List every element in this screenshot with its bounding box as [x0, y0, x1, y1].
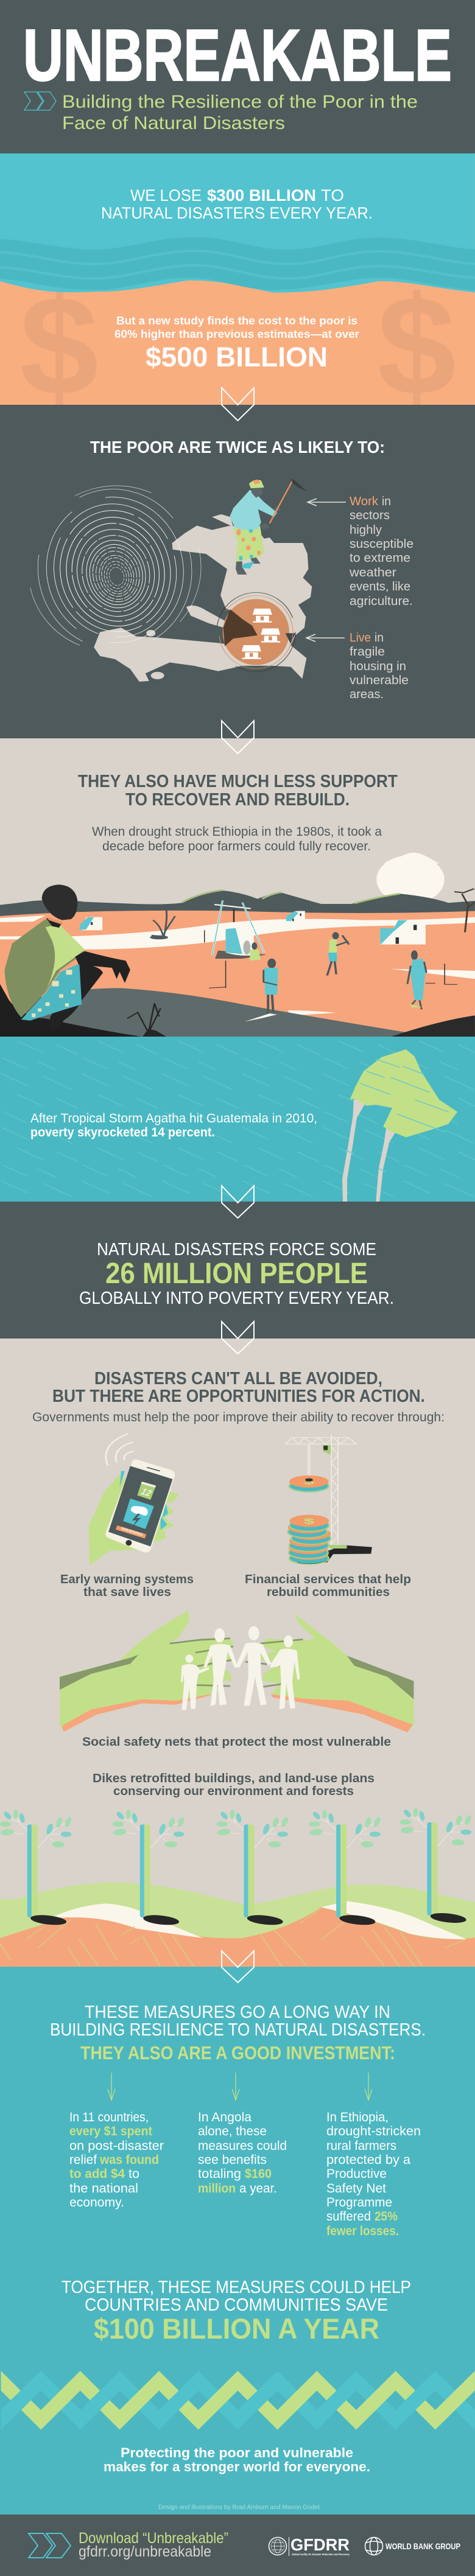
heading: THESE MEASURES GO A LONG WAY IN	[85, 2003, 390, 2022]
icon: crane with coins	[286, 1435, 372, 1564]
subtitle	[62, 92, 418, 133]
text: dikes: conserving our environment and forests	[113, 1784, 354, 1798]
column: Angola: million	[198, 2182, 236, 2196]
panel: less support	[0, 738, 475, 1037]
stat: 300 billion: $300 BILLION	[207, 186, 316, 205]
column: Ethiopia: In Ethiopia,	[326, 2110, 389, 2124]
icon: phone in hand: WARNING	[120, 1527, 144, 1537]
heading: BUT THERE ARE OPPORTUNITIES FOR ACTION.	[52, 1387, 425, 1406]
stat: 300 billion: WE LOSE	[130, 186, 202, 205]
zigzag band	[1, 2371, 475, 2430]
seated person	[50, 964, 103, 1031]
panel: opportunities	[0, 1339, 475, 1967]
column: Angola: alone, these	[198, 2124, 267, 2138]
closing message: Protecting the poor and vulnerable	[121, 2445, 353, 2460]
text: work: highly	[350, 523, 382, 537]
column: Ethiopia: Productive	[326, 2167, 387, 2181]
text: live: areas.	[350, 687, 384, 701]
text: work: susceptible	[350, 537, 413, 551]
panel: the poor	[0, 405, 475, 738]
farmer figure	[230, 478, 307, 575]
arrow to live	[306, 634, 345, 642]
text: early warning	[60, 1572, 194, 1599]
column: 11 countries: on post-disaster	[69, 2139, 164, 2153]
icon: crane with coins: $	[304, 1517, 314, 1525]
subtitle: Building the Resilience of the Poor in the	[62, 92, 418, 112]
arrow: chevron 1	[222, 388, 254, 421]
column: 11 countries: to add $4	[69, 2167, 125, 2181]
text: live	[350, 631, 409, 701]
stat: 26 million people: GLOBALLY INTO POVERTY EVERY YEAR.	[79, 1289, 394, 1308]
child with hoe	[332, 932, 339, 939]
heading	[78, 772, 398, 810]
arrow: chevron 3	[222, 1186, 254, 1218]
stat: 500 billion	[114, 314, 359, 373]
text block: Agatha	[30, 1111, 317, 1139]
stat: 500 billion: $500 BILLION	[146, 341, 328, 373]
download text: Download “Unbreakable”	[79, 2530, 228, 2547]
stat: 26 million people	[79, 1240, 394, 1308]
download text	[79, 2530, 228, 2560]
text block: Agatha: After Tropical Storm Agatha hit Guatemala in 2010,	[30, 1111, 317, 1125]
heading	[50, 2003, 426, 2040]
column: 11 countries: In 11 countries,	[69, 2110, 149, 2124]
heading: DISASTERS CAN'T ALL BE AVOIDED,	[94, 1369, 382, 1388]
heading: BUILDING RESILIENCE TO NATURAL DISASTERS.	[50, 2020, 426, 2040]
text: work: sectors	[350, 508, 390, 522]
heading	[52, 1369, 425, 1406]
text: work: to extreme	[350, 551, 410, 565]
icon: phone in hand	[89, 1434, 178, 1566]
text: live: in	[375, 631, 384, 645]
closing message: makes for a stronger world for everyone.	[104, 2459, 370, 2474]
column: Ethiopia: Programme	[326, 2196, 392, 2210]
arrows	[108, 2073, 372, 2100]
text: work: events, like	[350, 579, 410, 593]
text block: Agatha: poverty skyrocketed 14 percent.	[30, 1125, 215, 1139]
arrow: chevron 4	[222, 1321, 254, 1354]
column: Ethiopia: drought-stricken	[326, 2124, 421, 2138]
foreground black ground	[0, 984, 142, 1037]
heading: THEY ALSO HAVE MUCH LESS SUPPORT	[78, 772, 398, 791]
stat: 100 billion	[62, 2278, 411, 2345]
text: live: vulnerable	[350, 673, 409, 687]
saplings row	[0, 1808, 473, 1927]
dead trees	[152, 906, 175, 937]
illustration: wind-blown palms	[342, 1049, 457, 1202]
icon: dollar sign right: $	[377, 267, 456, 425]
column: Ethiopia: Safety Net	[326, 2182, 386, 2196]
arrow to work	[308, 499, 346, 506]
column: 11 countries: every $1 spent	[69, 2124, 152, 2138]
logo: GFDRR	[269, 2535, 350, 2556]
credit: Design and illustrations by Brad Amburn and Manon Godet	[158, 2504, 320, 2511]
column: Angola: totaling	[198, 2167, 241, 2181]
stat: 500 billion: But a new study finds the cost to the poor is	[116, 314, 357, 327]
heading: TO RECOVER AND REBUILD.	[125, 790, 350, 810]
arrow: chevron 2	[222, 721, 254, 754]
column: Ethiopia: rural farmers	[326, 2139, 396, 2153]
column: Ethiopia: suffered	[326, 2210, 371, 2224]
header band	[0, 0, 475, 153]
stat: 100 billion: COUNTRIES AND COMMUNITIES SAVE	[85, 2295, 388, 2315]
stat: 26 million people: NATURAL DISASTERS FORCE SOME	[97, 1240, 376, 1259]
map of Hispaniola	[94, 514, 312, 682]
text: financial services: Financial services that help	[245, 1572, 411, 1586]
footer	[0, 2515, 475, 2576]
panel: losses	[0, 153, 475, 425]
icon: footer chevrons	[29, 2533, 71, 2558]
panel: 26 million	[0, 1202, 475, 1339]
vulnerable area circle with houses	[217, 592, 295, 671]
icon: dollar sign left: $	[19, 267, 99, 425]
stat: 26 million people: 26 MILLION PEOPLE	[105, 1258, 368, 1290]
text: social safety nets: Social safety nets that protect the most vulnerable	[82, 1735, 391, 1749]
text: work: agriculture.	[350, 594, 413, 608]
stat: 300 billion: NATURAL DISASTERS EVERY YEAR.	[101, 204, 373, 222]
column: Ethiopia	[326, 2110, 421, 2238]
text block: Ethiopia: When drought struck Ethiopia in the 1980s, it took a	[92, 825, 382, 839]
text: work	[349, 494, 413, 608]
column: Ethiopia: fewer losses.	[326, 2224, 399, 2238]
stat: 100 billion: TOGETHER, THESE MEASURES COULD HELP	[62, 2278, 411, 2297]
column: Angola: In Angola	[198, 2110, 252, 2124]
houses	[79, 917, 102, 930]
text: dikes	[93, 1771, 375, 1798]
panel: investment	[0, 1967, 475, 2515]
panel: storm Agatha	[0, 1037, 475, 1202]
logo: GFDRR: Global Facility for Disaster Reduction and Recovery	[292, 2553, 350, 2556]
text: financial services	[245, 1572, 411, 1599]
arrow: chevron 5	[222, 1951, 254, 1983]
stat: 100 billion: $100 BILLION A YEAR	[94, 2312, 379, 2345]
stat: 300 billion: TO	[321, 186, 344, 205]
text: work: in	[382, 494, 391, 508]
text: live: housing in	[350, 659, 406, 673]
column: 11 countries: was found	[99, 2153, 159, 2167]
column: Angola: see benefits	[198, 2153, 267, 2167]
text: work: weather	[349, 565, 396, 579]
text: work: Work	[350, 494, 379, 508]
foreground plant	[127, 1003, 161, 1033]
text: live: fragile	[350, 645, 385, 659]
icon: phone in hand: 12	[138, 1487, 154, 1499]
stat: 300 billion	[101, 186, 373, 222]
text: live: Live	[350, 631, 371, 645]
icon: header chevrons	[24, 92, 56, 110]
heading: THE POOR ARE TWICE AS LIKELY TO:	[90, 438, 385, 457]
illustration: land and trees	[0, 1883, 475, 1967]
walking child	[411, 950, 418, 960]
column: Angola: measures could	[198, 2139, 287, 2153]
icon: crane with coins: $	[304, 1478, 314, 1486]
subheading: THEY ALSO ARE A GOOD INVESTMENT:	[80, 2042, 395, 2063]
column: Angola	[198, 2110, 287, 2196]
column: Angola: $160	[245, 2167, 272, 2181]
column: 11 countries: relief	[69, 2153, 97, 2167]
standing child	[267, 959, 276, 968]
closing message	[104, 2445, 370, 2474]
text: early warning: Early warning systems	[60, 1572, 194, 1586]
logo: World Bank Group	[365, 2537, 460, 2555]
column: Ethiopia: protected by a	[326, 2153, 410, 2167]
text block: Ethiopia: decade before poor farmers could fully recover.	[102, 839, 371, 853]
water and waves	[0, 153, 475, 293]
well	[212, 900, 264, 956]
column: 11 countries: the national	[69, 2182, 138, 2196]
logo: GFDRR: GFDRR	[290, 2535, 350, 2554]
illustration: drought landscape	[0, 853, 475, 1037]
column: 11 countries: to	[128, 2167, 139, 2181]
text: early warning: that save lives	[83, 1585, 171, 1599]
hurricane spiral	[11, 467, 219, 670]
intro text: Governments must help the poor improve their ability to recover through:	[32, 1410, 445, 1424]
text: financial services: rebuild communities	[267, 1585, 390, 1599]
column: Ethiopia: 25%	[375, 2210, 398, 2224]
text block: Ethiopia	[92, 825, 382, 853]
column: 11 countries	[69, 2110, 164, 2210]
column: 11 countries: economy.	[69, 2196, 124, 2210]
text: dikes: Dikes retrofitted buildings, and land-use plans	[93, 1771, 375, 1785]
download text: gfdrr.org/unbreakable	[79, 2543, 211, 2560]
subtitle: Face of Natural Disasters	[62, 113, 285, 133]
illustration: hands protecting family	[60, 1611, 413, 1732]
stat: 500 billion: 60% higher than previous estimates—at over	[114, 327, 359, 340]
column: Angola: a year.	[239, 2182, 277, 2196]
